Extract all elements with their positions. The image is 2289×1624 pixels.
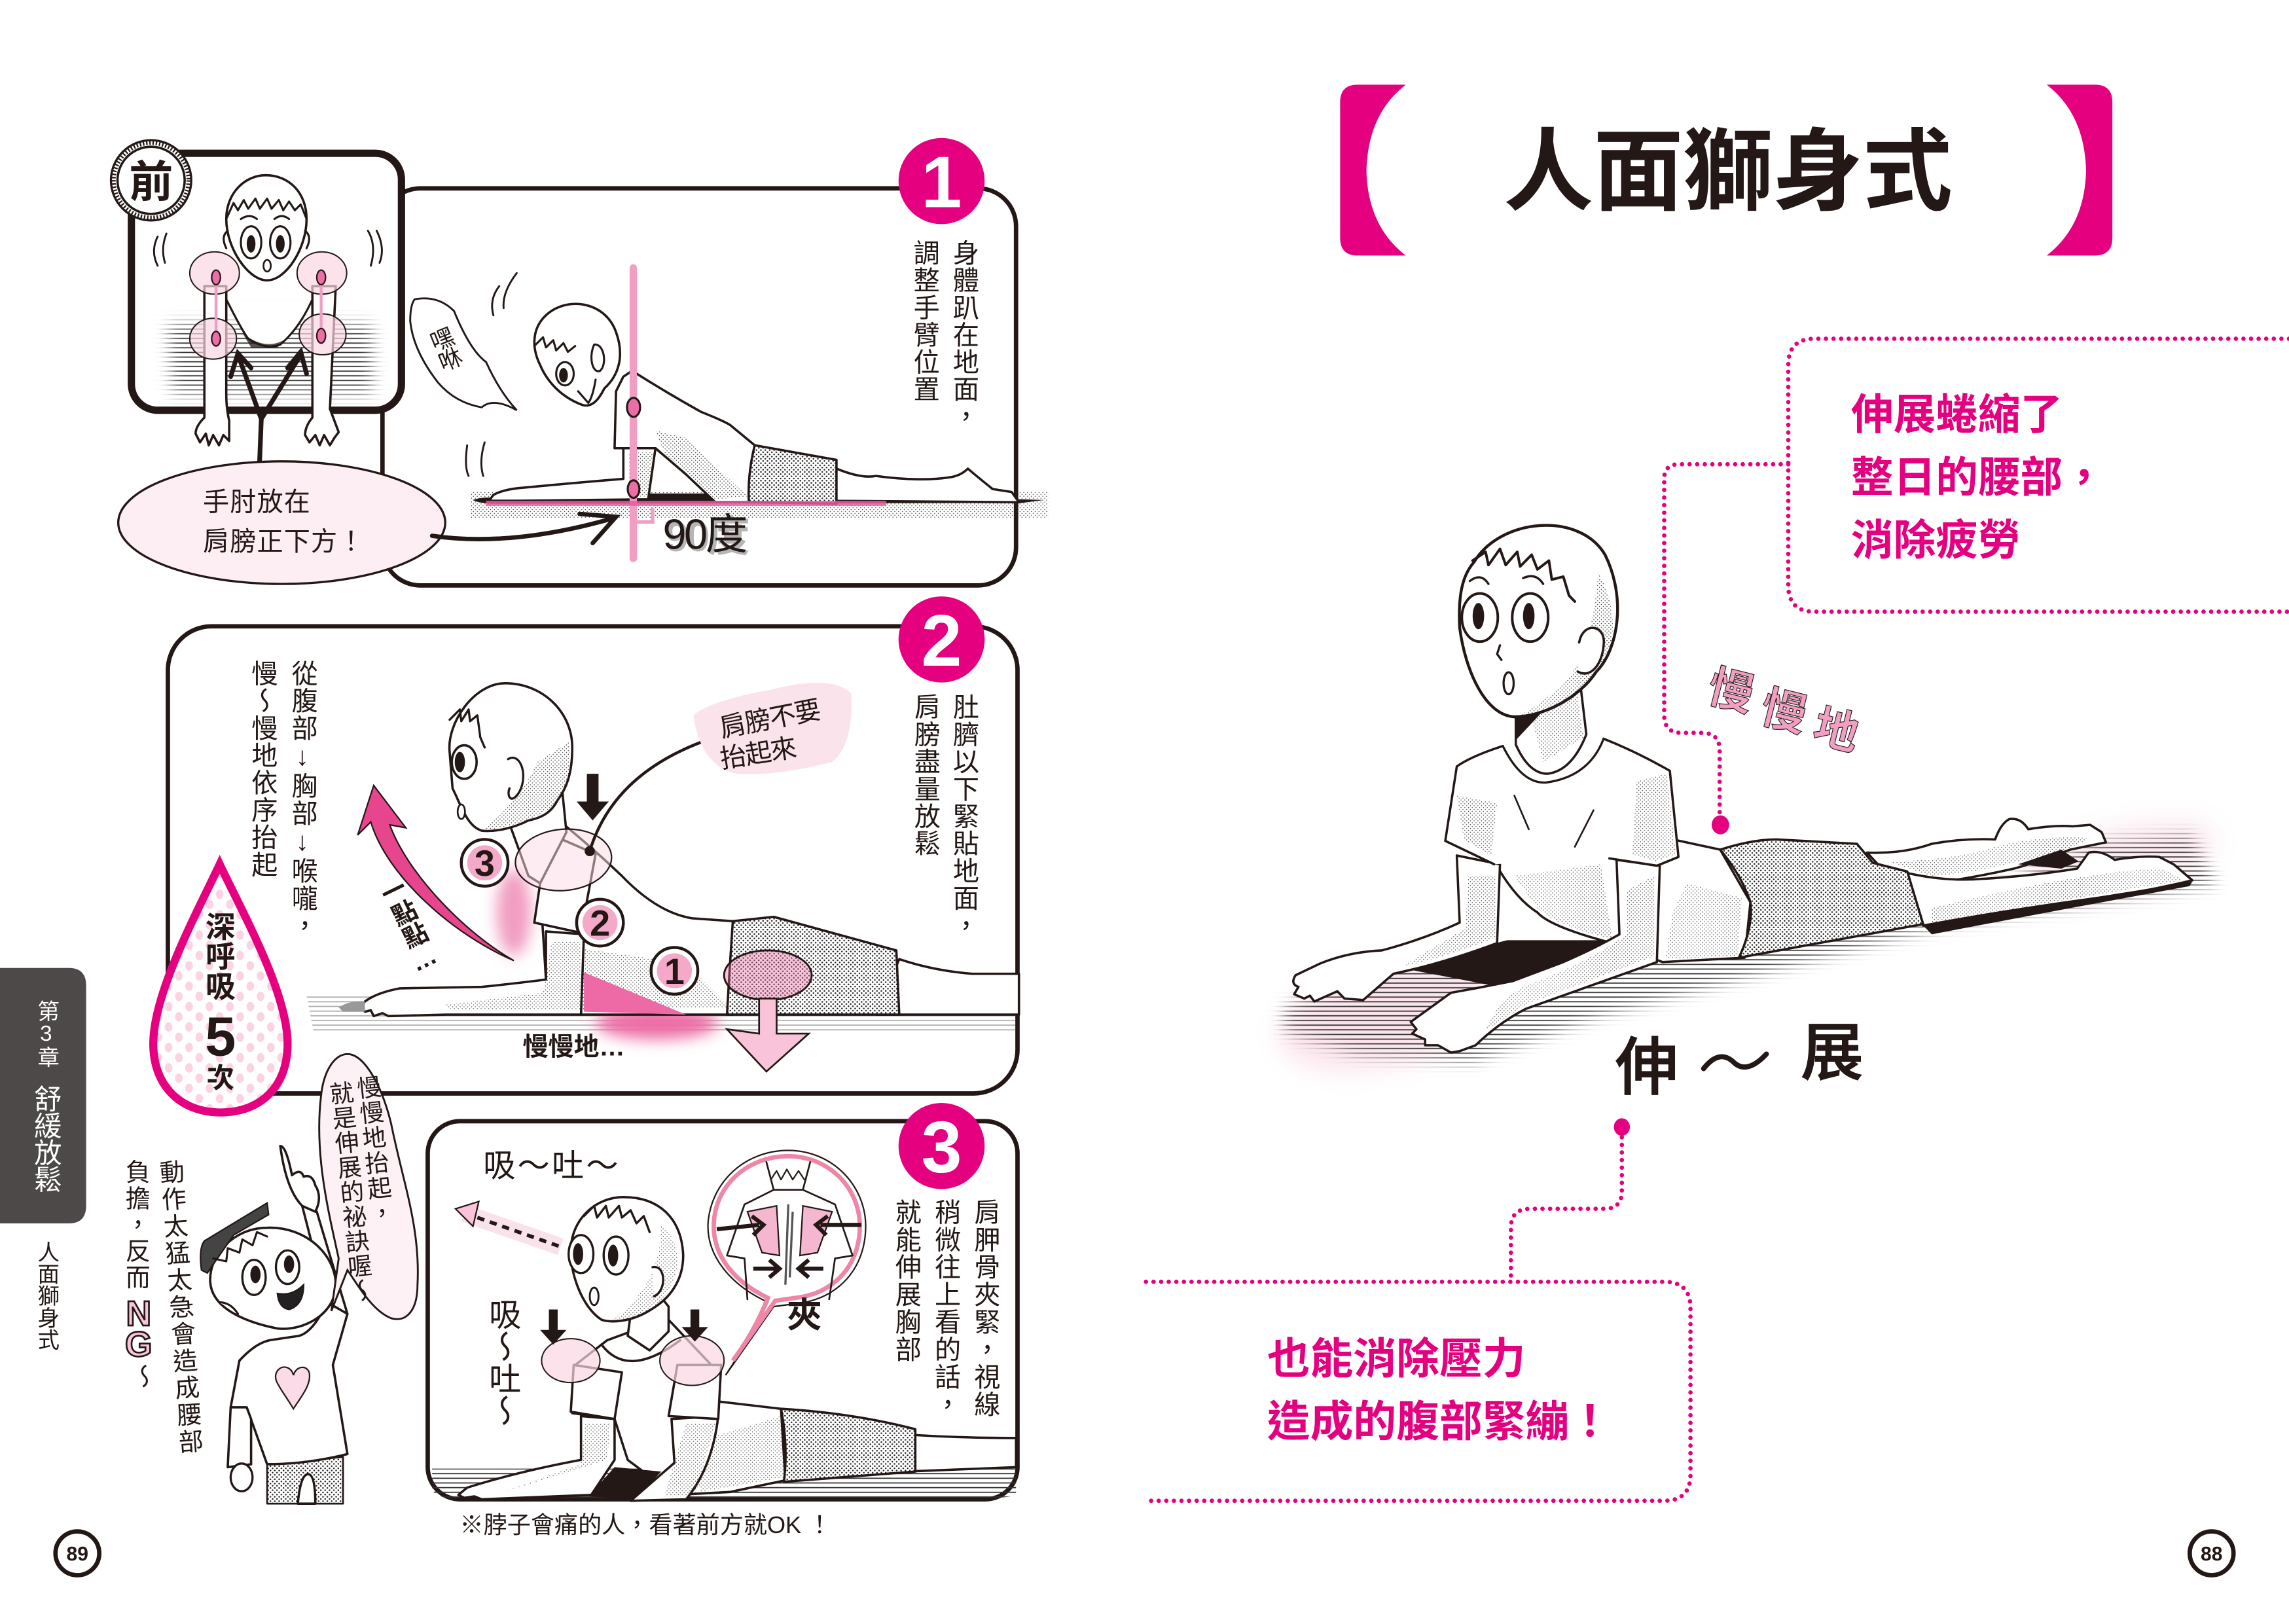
shoulder highlight [513,825,614,895]
label: slowly, pink: 慢 [1756,681,1812,742]
label: slowly, pink [1703,660,1864,761]
front view badge [111,140,191,221]
step 2 ground hatching [306,996,1016,1034]
kid speech bubble [319,1054,418,1319]
under-arm shadow [1401,940,1618,988]
ear [1577,628,1604,674]
callout: relieve abdominal tension: 也能消除壓力 [1267,1335,1526,1383]
gaze arrow [456,1202,560,1247]
label: little by little: 一點點… [373,874,444,978]
connector to abdomen [1511,1118,1630,1282]
step 2 number badge: 2 [921,600,962,681]
chapter tab [0,968,86,1223]
step 1 number badge: 1 [921,141,962,223]
kid note: 動作太猛太急會造成腰部 [154,1159,204,1457]
footnote: ※脖子會痛的人，看著前方就OK ！ [460,1511,831,1538]
cloud note: do not lift shoulders: 抬起來 [718,733,798,774]
down arrow: press hips [727,999,809,1072]
step 3 ground hatching [432,1469,1016,1498]
label: slowly, pink: 慢 [1703,660,1759,721]
step 3 figure [458,1197,1016,1501]
chapter tab: 第3章 [34,1000,58,1068]
label: slowly, pink: 地 [1809,700,1864,761]
label: stretch [1615,1018,1864,1103]
kid note: N [126,1295,151,1333]
panel: step 2 [168,626,1019,1093]
order note: 慢～慢地依序抬起 [247,660,277,878]
callout: elbow under shoulder [118,461,445,584]
step 1 instruction [909,240,979,430]
cloud note: do not lift shoulders [693,683,852,774]
callout: relieve fatigue [1788,338,2289,612]
far leg [1867,819,2106,883]
step 1 instruction: 身體趴在地面， [948,240,979,430]
panel: step 1 [382,189,1048,585]
panel: step 3 [427,1121,1017,1501]
step 3 instruction: 就能伸展胸部 [891,1199,921,1363]
kid character [200,1146,348,1504]
order marker 3 [461,839,508,886]
90 degree label: 90度 [663,511,747,558]
front view badge: 前 [129,158,173,207]
front view figure [196,175,338,445]
kid note: G [125,1326,153,1364]
hair [1473,549,1575,602]
main figure glow [1269,806,2224,1089]
kid speech bubble: 慢慢地抬起， [352,1074,395,1227]
main figure [1241,526,2248,1095]
shoulder highlights with arrows [540,1310,724,1386]
page number 88 [2190,1532,2233,1575]
nose and mouth [1497,645,1513,695]
motion marks [466,273,517,476]
90 degree label: 90度 [665,513,749,560]
callout: relieve fatigue: 消除疲勞 [1851,516,2021,564]
front view motion marks [154,230,382,266]
step 2 instruction: 肩膀盡量放鬆 [910,693,939,857]
inset: shoulder blades [708,1150,866,1375]
callout: relieve abdominal tension [1146,1282,1691,1501]
step 3 number badge [899,1103,984,1189]
cloud note: do not lift shoulders: 肩膀不要 [717,695,822,743]
drop: deep breath 5 times [153,864,287,1112]
chapter tab: 舒緩放鬆 [31,1085,62,1192]
label: slowly: 慢慢地… [522,1034,624,1062]
label: stretch: 伸 [1615,1033,1678,1103]
callout: relieve fatigue: 整日的腰部， [1851,454,2105,501]
callout: elbow under shoulder: 手肘放在 [203,488,311,517]
t-shirt [1445,730,1678,866]
arrow to 90 degree point [432,514,616,543]
label: breathe vertical: 吸～吐～ [484,1298,520,1426]
order note [247,660,317,939]
right arm [1411,860,1660,1053]
page number 88: 88 [2201,1543,2223,1565]
step 2 number badge [899,596,984,683]
head [1459,526,1617,717]
speech bubble: heave: 嘿咻 [424,323,465,375]
order marker 2 [577,899,623,946]
step 2 instruction: 肚臍以下緊貼地面， [948,693,979,939]
left arm [1293,856,1500,1001]
step 1 instruction: 調整手臂位置 [909,240,939,403]
label: breathe horizontal: 吸～吐～ [483,1149,621,1184]
torso [1494,832,1750,962]
step 1 side view figure [470,304,1048,518]
shoulder and elbow highlight circles [190,252,347,359]
step 2 figure [338,683,1019,1016]
front view ground hatching [157,314,384,405]
speech bubble: heave [410,298,517,410]
black down arrow with leader [577,740,706,856]
eyes [1462,594,1548,641]
step 3 instruction: 稍微往上看的話， [931,1199,960,1418]
step 1 number badge [899,138,984,224]
order marker 3: 3 [475,843,495,884]
callout: elbow under shoulder: 肩膀正下方！ [203,527,365,556]
step 3 instruction [891,1199,1000,1418]
drop: deep breath 5 times: 5 [205,1005,236,1068]
title bracket right [2047,84,2112,255]
connector to lower back [1664,464,1788,835]
ground hatching [1272,824,2224,1072]
title: 人面獅身式 [1504,122,1953,223]
kid speech bubble: 就是伸展的祕訣喔～ [325,1079,376,1305]
order marker 1 [651,947,698,994]
pink floor line [486,501,886,506]
kid note: ～ [128,1363,155,1388]
step 2 instruction [910,693,979,939]
panel: front view [132,153,401,445]
order marker 2: 2 [590,903,610,944]
right angle mark [634,508,653,522]
page number 89 [56,1532,99,1575]
drop: deep breath 5 times: 次 [207,1063,234,1094]
step 2 pink glows [496,869,718,1039]
near leg [1907,852,2192,934]
shoulder and elbow markers [627,398,640,498]
Y arrow from callout to elbows [230,352,306,473]
step 3 number badge: 3 [921,1106,962,1188]
drop: deep breath 5 times: 深呼吸 [202,911,235,1001]
lift arrow [357,785,514,961]
order marker 1: 1 [664,951,685,992]
kid note: 負擔，反而 [121,1159,149,1291]
order note: 從腹部↓胸部↓喉嚨， [287,660,317,939]
pink plumb line [630,264,637,562]
page number 89: 89 [66,1543,88,1565]
neck [1516,686,1587,774]
kid note [121,1159,204,1457]
brows [1469,576,1543,584]
step 3 instruction: 肩胛骨夾緊，視線 [970,1199,1000,1418]
label: stretch: 展 [1801,1018,1864,1088]
callout: relieve abdominal tension: 造成的腹部緊繃！ [1267,1398,1612,1446]
label: squeeze: 夾 [787,1296,822,1335]
shorts [1720,839,1923,958]
hip highlight [724,950,812,1000]
title bracket left [1340,84,1406,255]
section label: pose name: 人面獅身式 [34,1241,58,1350]
callout: relieve fatigue: 伸展蜷縮了 [1851,391,2063,439]
